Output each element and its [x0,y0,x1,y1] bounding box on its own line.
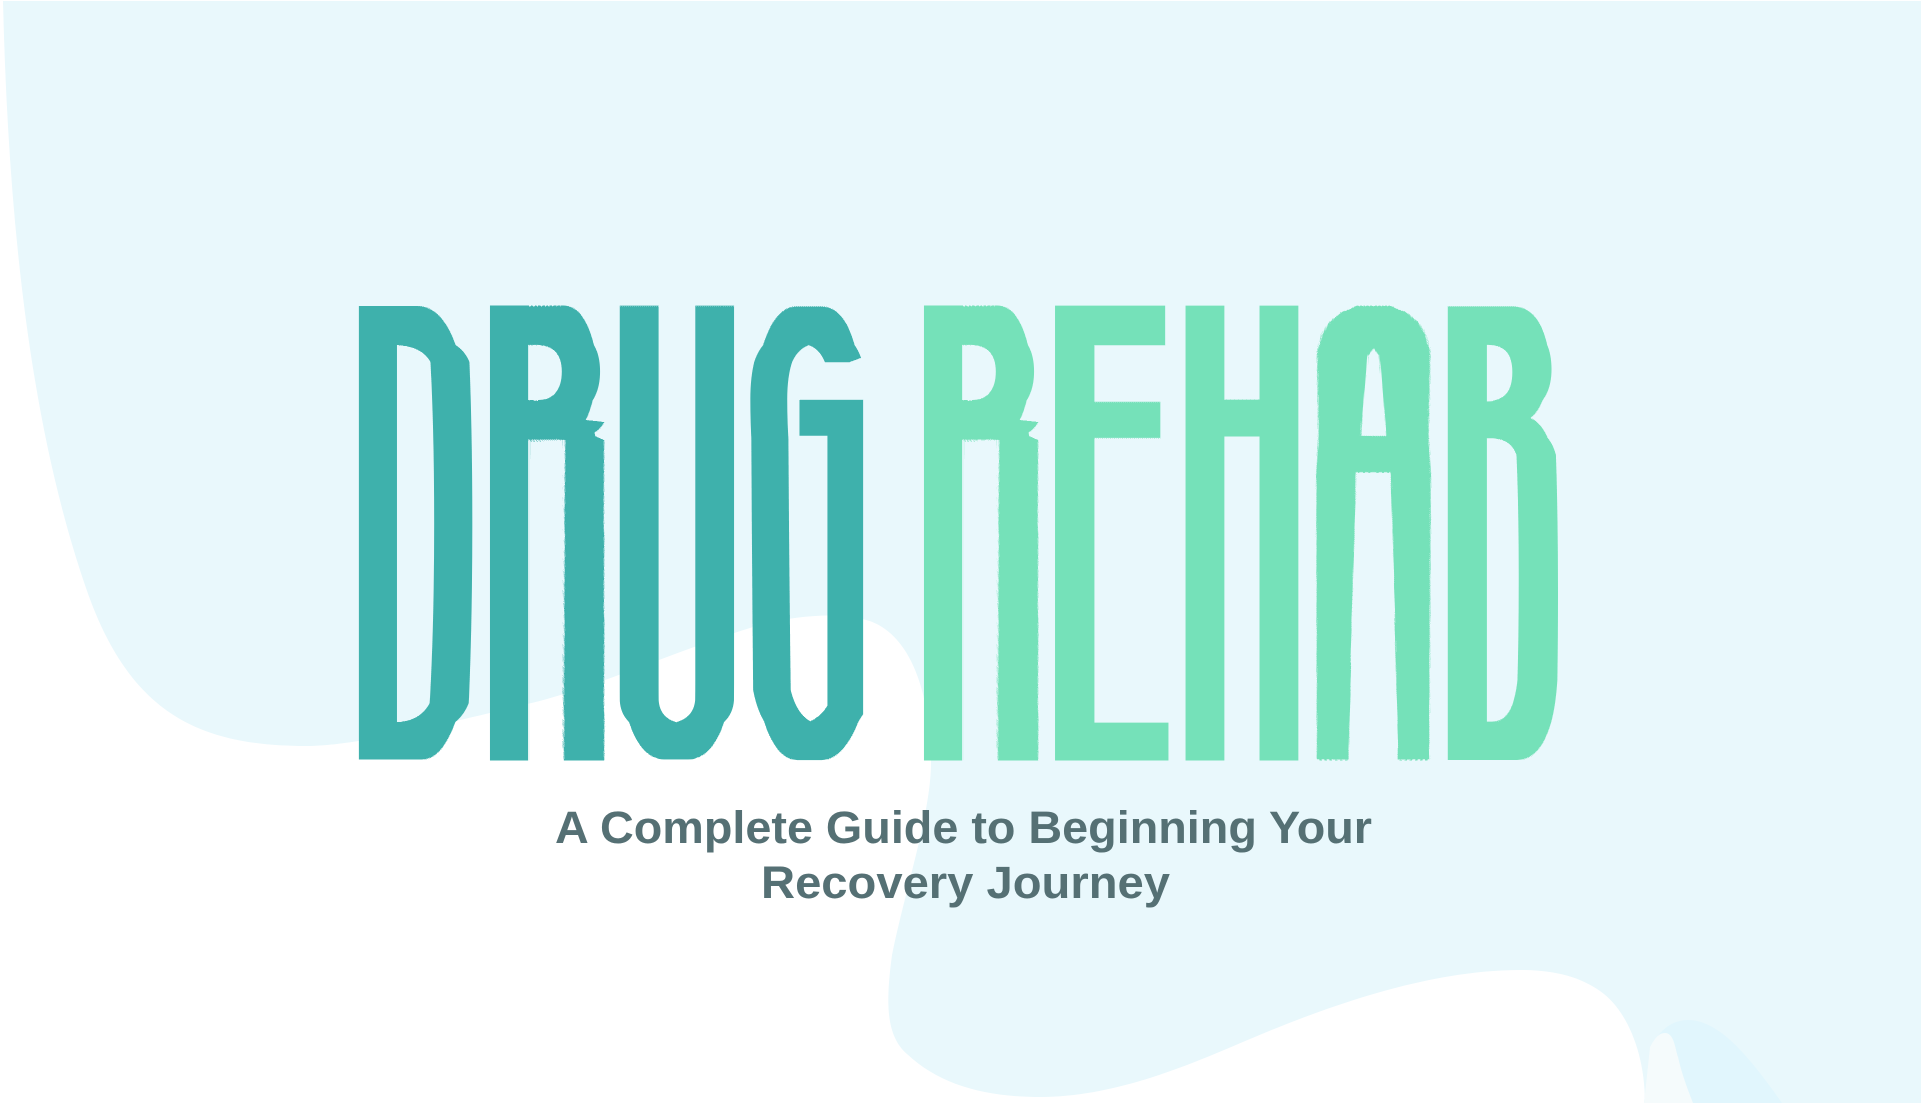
subtitle line 1: A Complete Guide to Beginning Your [555,802,1372,853]
title word: DRUG: G [756,133,862,864]
corner blob: deeper blue [1644,1020,1782,1103]
title word: REHAB [924,92,1558,853]
title word: DRUG: D [359,167,468,899]
title word: REHAB: E [1054,118,1164,849]
subtitle line 2: Recovery Journey [761,857,1170,908]
corner blob: pale white [1644,1033,1693,1103]
title word: REHAB: B [1447,123,1555,853]
title word: DRUG: R [490,101,600,832]
title word: DRUG [358,101,864,944]
title word: DRUG: U [620,213,735,944]
title word: REHAB: H [1185,117,1300,848]
title word: REHAB: R [924,101,1034,832]
title: DRUG REHAB [358,92,1558,944]
title word: REHAB: A [1326,92,1422,822]
